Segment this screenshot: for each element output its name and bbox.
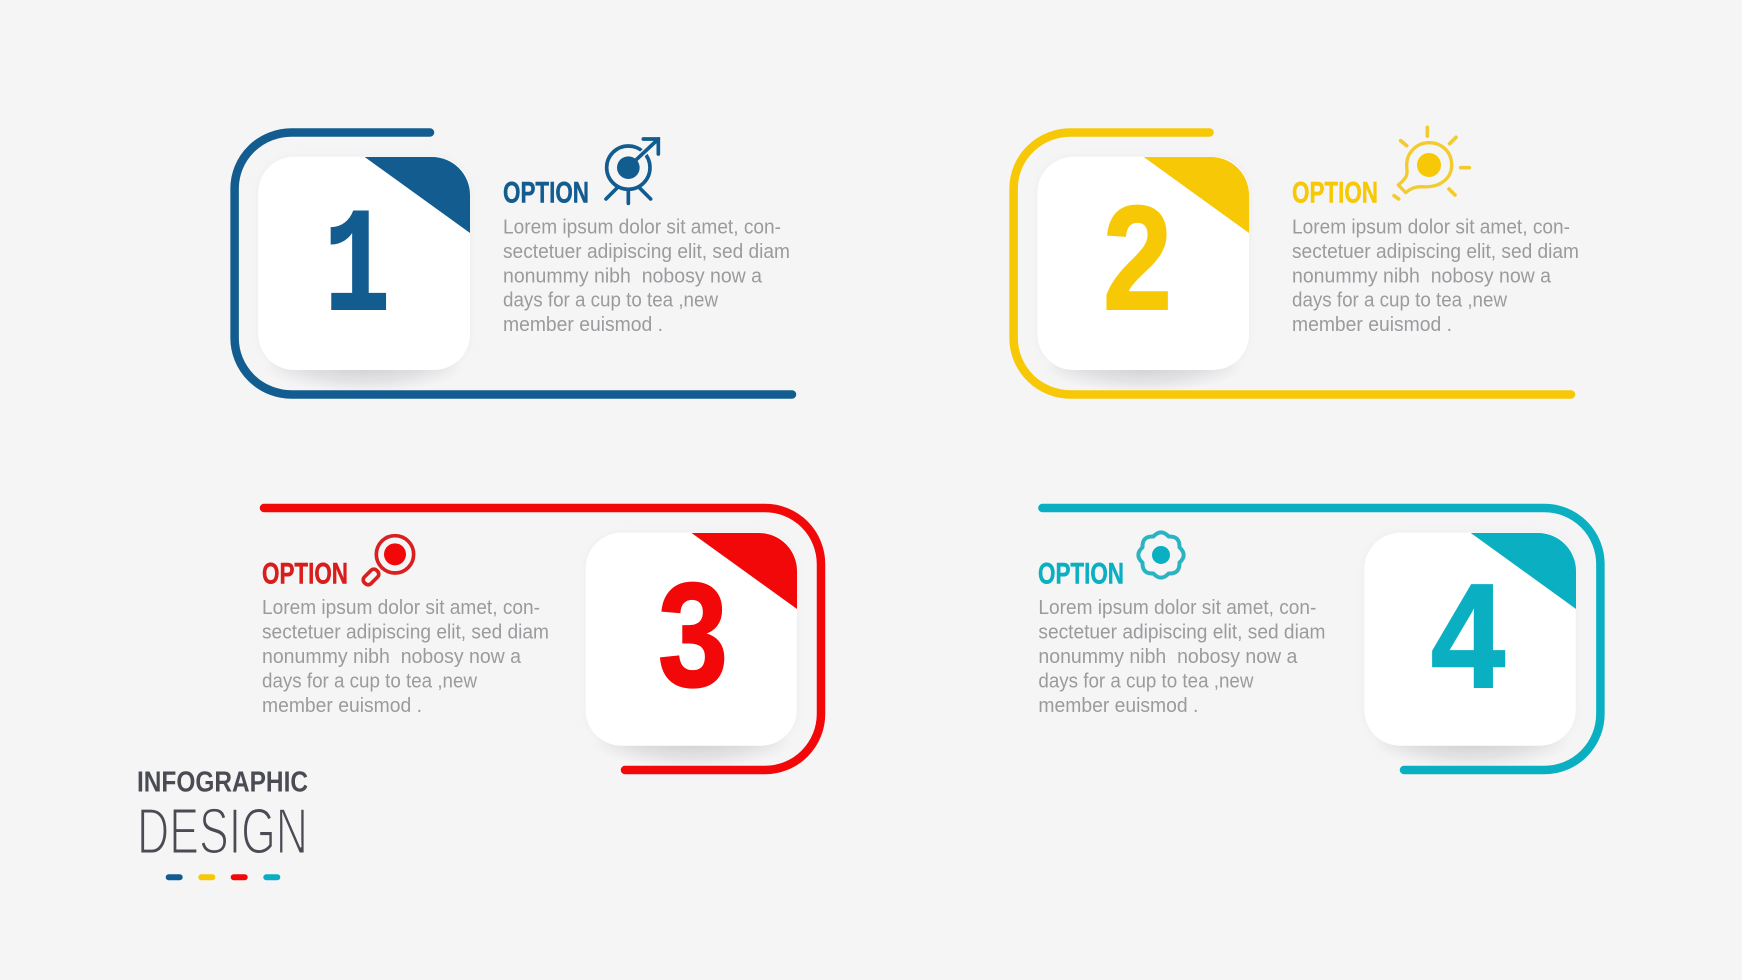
colour dashes bbox=[166, 874, 280, 880]
heading: option 1: OPTION bbox=[503, 177, 589, 210]
title: design: DESIGN bbox=[137, 794, 308, 867]
text block 2: sectetuer adipiscing elit, sed diam bbox=[1292, 240, 1579, 263]
text block 3: Lorem ipsum dolor sit amet, con- bbox=[262, 596, 540, 619]
text block 1: member euismod . bbox=[503, 313, 663, 336]
text block 4: member euismod . bbox=[1038, 694, 1198, 717]
text block 2: member euismod . bbox=[1292, 313, 1452, 336]
text block 2: days for a cup to tea ,new bbox=[1292, 289, 1507, 312]
text block 3: sectetuer adipiscing elit, sed diam bbox=[262, 621, 549, 644]
number card 2 bbox=[1038, 157, 1249, 370]
card shadow 4 bbox=[1371, 720, 1571, 768]
text block 1: days for a cup to tea ,new bbox=[503, 289, 718, 312]
text block 1: nonummy nibh nobosy now a bbox=[503, 264, 763, 287]
number 2: 2 bbox=[1103, 176, 1172, 341]
card shadow 1 bbox=[264, 344, 464, 392]
heading: option 4: OPTION bbox=[1038, 557, 1124, 590]
panel: option 1 bbox=[235, 132, 792, 395]
text block 3 bbox=[262, 596, 549, 717]
icon: light bulb bbox=[1394, 127, 1469, 199]
card corner 4 bbox=[1471, 533, 1576, 609]
text block 4: nonummy nibh nobosy now a bbox=[1038, 645, 1298, 668]
text block 4: days for a cup to tea ,new bbox=[1038, 669, 1254, 692]
card corner 2 bbox=[1144, 157, 1249, 233]
text block 2: Lorem ipsum dolor sit amet, con- bbox=[1292, 216, 1570, 238]
text block 4: Lorem ipsum dolor sit amet, con- bbox=[1038, 596, 1316, 619]
heading: option 2: OPTION bbox=[1292, 177, 1378, 210]
text block 3: member euismod . bbox=[262, 694, 422, 717]
number 4: 4 bbox=[1431, 554, 1505, 719]
number card 1 bbox=[258, 157, 470, 370]
text block 1: sectetuer adipiscing elit, sed diam bbox=[503, 240, 790, 263]
text block 4: sectetuer adipiscing elit, sed diam bbox=[1038, 621, 1325, 644]
frame line 1 bbox=[235, 132, 792, 395]
number card 4 bbox=[1364, 533, 1576, 746]
frame line 3 bbox=[264, 508, 821, 770]
text block 1 bbox=[503, 216, 790, 336]
number 3: 3 bbox=[658, 553, 728, 718]
title: infographic: INFOGRAPHIC bbox=[137, 767, 308, 799]
text block 3: days for a cup to tea ,new bbox=[262, 669, 477, 692]
icon: target with arrow bbox=[606, 139, 658, 203]
icon: gear badge bbox=[1138, 532, 1184, 578]
panel: option 2 bbox=[1014, 127, 1579, 395]
number 1: 1 bbox=[324, 187, 390, 354]
frame line 4 bbox=[1042, 508, 1600, 770]
text block 1: Lorem ipsum dolor sit amet, con- bbox=[503, 216, 781, 238]
card shadow 2 bbox=[1043, 344, 1243, 392]
text block 4 bbox=[1038, 596, 1325, 717]
title block bbox=[137, 767, 308, 880]
number card 3 bbox=[586, 533, 797, 746]
text block 2 bbox=[1292, 216, 1579, 336]
panel: option 4 bbox=[1038, 508, 1600, 770]
frame line 2 bbox=[1014, 132, 1571, 395]
card shadow 3 bbox=[592, 720, 792, 768]
card corner 1 bbox=[365, 157, 470, 233]
text block 2: nonummy nibh nobosy now a bbox=[1292, 264, 1552, 287]
card corner 3 bbox=[692, 533, 797, 609]
text block 3: nonummy nibh nobosy now a bbox=[262, 645, 522, 668]
icon: magnifier bbox=[362, 536, 414, 586]
panel: option 3 bbox=[262, 508, 821, 770]
heading: option 3: OPTION bbox=[262, 557, 348, 590]
